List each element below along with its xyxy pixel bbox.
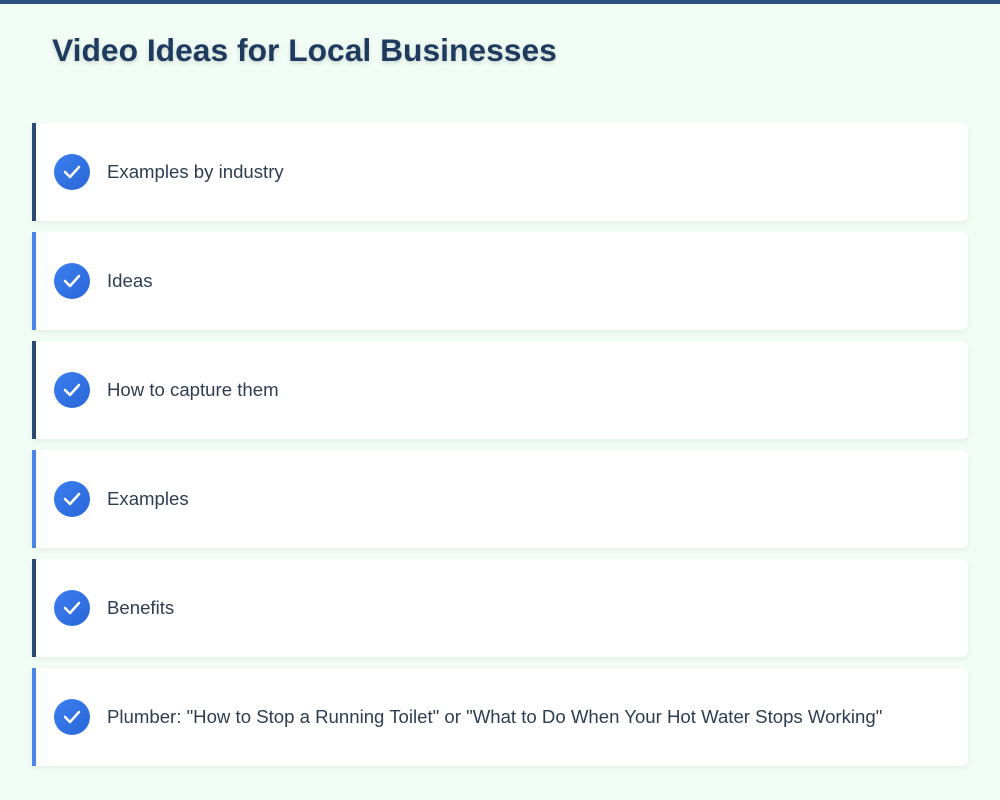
card: plumber (32, 668, 968, 766)
icon: check (54, 263, 90, 299)
card: examples: Examples (107, 488, 189, 509)
card: benefits: Benefits (107, 597, 174, 618)
icon: check (54, 481, 90, 517)
card: ideas: Ideas (107, 270, 152, 291)
icon: check (54, 372, 90, 408)
card: benefits (32, 559, 968, 657)
icon: check (54, 699, 90, 735)
title: Video Ideas for Local Businesses (52, 32, 557, 68)
card: ideas (32, 232, 968, 330)
card: examples (32, 450, 968, 548)
icon: check (54, 154, 90, 190)
card: examples by industry: Examples by industry (107, 161, 284, 182)
icon: check (54, 590, 90, 626)
card: how to capture (32, 341, 968, 439)
card: how to capture: How to capture them (107, 379, 279, 400)
card: examples by industry (32, 123, 968, 221)
card: plumber: Plumber: "How to Stop a Running Toilet" or "What to Do When Your Hot Water Stops Working" (107, 706, 882, 727)
